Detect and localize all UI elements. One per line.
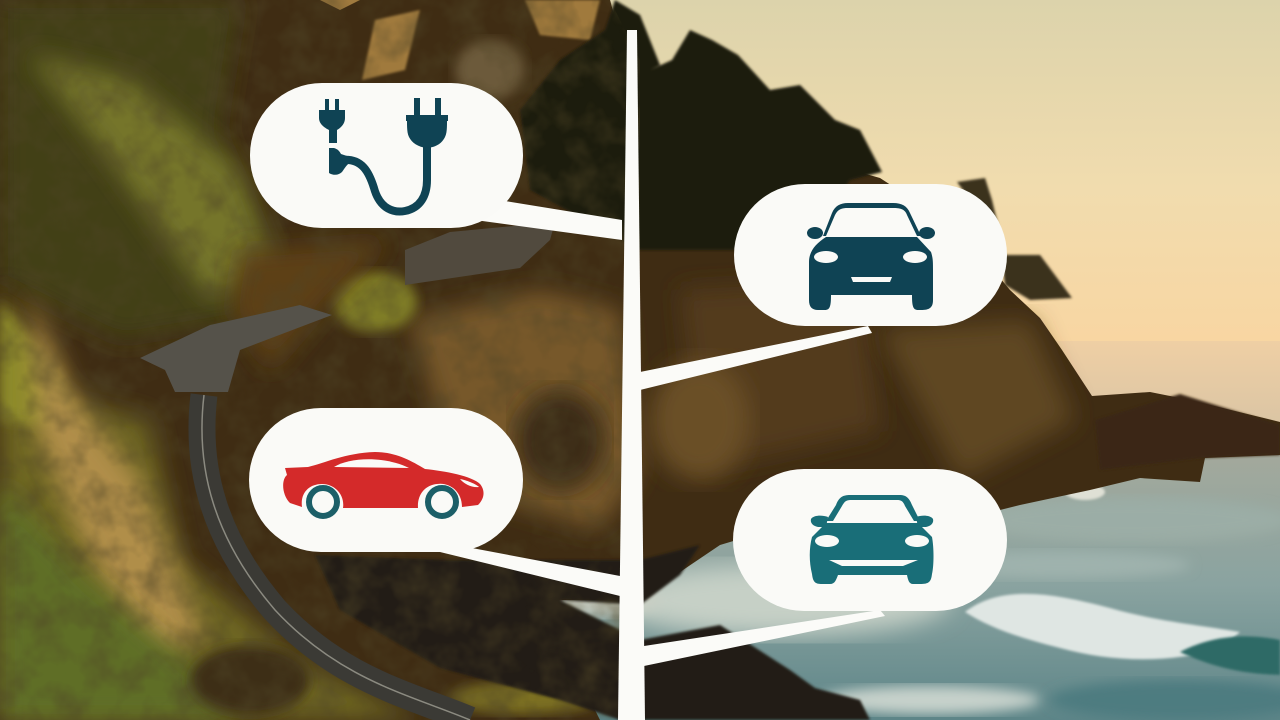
winding road <box>140 222 555 720</box>
sky <box>600 0 1280 342</box>
dark trees <box>520 0 1072 300</box>
icon: red side view car <box>283 452 484 516</box>
ocean <box>540 450 1280 720</box>
icon: front view car <box>807 203 935 310</box>
panel: red sports car <box>249 408 523 552</box>
mottled texture over the land <box>0 0 640 720</box>
connector: vertical trunk <box>618 30 645 720</box>
sunlit rock face <box>410 290 640 530</box>
rocks on shore <box>315 545 870 720</box>
green vegetation <box>0 0 275 340</box>
connector: plug branch <box>475 201 622 240</box>
panel: front car dark <box>734 184 1007 326</box>
icon: teal front view car <box>810 495 934 584</box>
panel: plug and cable <box>250 83 523 228</box>
connector: car front branch <box>640 326 872 390</box>
connector: red car branch <box>440 542 620 596</box>
icon: charging cable <box>319 98 448 212</box>
connector: teal car branch <box>644 610 885 666</box>
panel: front car teal <box>733 469 1007 611</box>
distant sea haze <box>1040 341 1280 431</box>
